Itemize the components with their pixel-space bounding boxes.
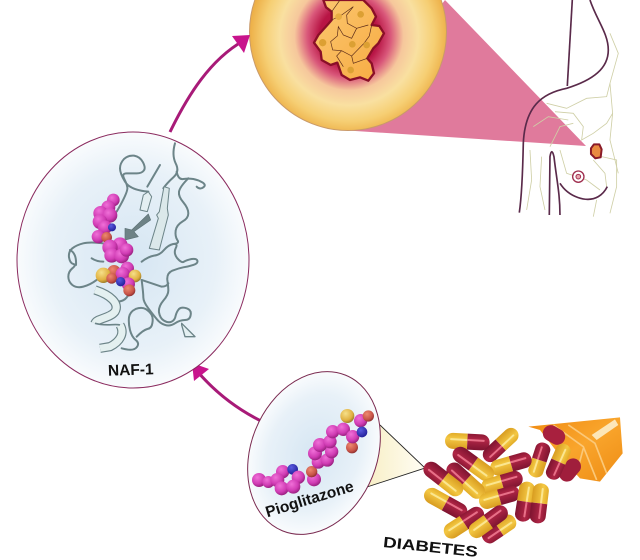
nipple (573, 171, 584, 182)
lymphatic vessels (527, 33, 618, 217)
tumor cell cluster (314, 0, 384, 81)
magnification wedge: pink beam (340, 0, 586, 146)
pioglitazone label: Pioglitazone (264, 478, 356, 521)
NAF-1 bound drug spheres (92, 194, 141, 296)
breast outline illustration (519, 0, 618, 217)
pill bottle (528, 417, 623, 482)
pioglitazone molecule spheres (252, 409, 374, 495)
zoom wedge: capsule to pioglitazone (367, 425, 425, 487)
protein ribbon structure (68, 143, 205, 350)
NAF-1 label: NAF-1 (108, 361, 154, 380)
DIABETES label: DIABETES (382, 534, 479, 560)
arrow: pioglitazone to NAF-1 (192, 363, 261, 421)
arrow: NAF-1 to tumor (170, 35, 250, 132)
helix ribbon (95, 290, 122, 348)
tumor magnified circle (250, 0, 446, 130)
capsules pile (420, 422, 584, 546)
panel: NAF-1 protein circle (17, 132, 249, 388)
panel: pioglitazone circle (224, 352, 404, 554)
small tumor (591, 144, 602, 158)
